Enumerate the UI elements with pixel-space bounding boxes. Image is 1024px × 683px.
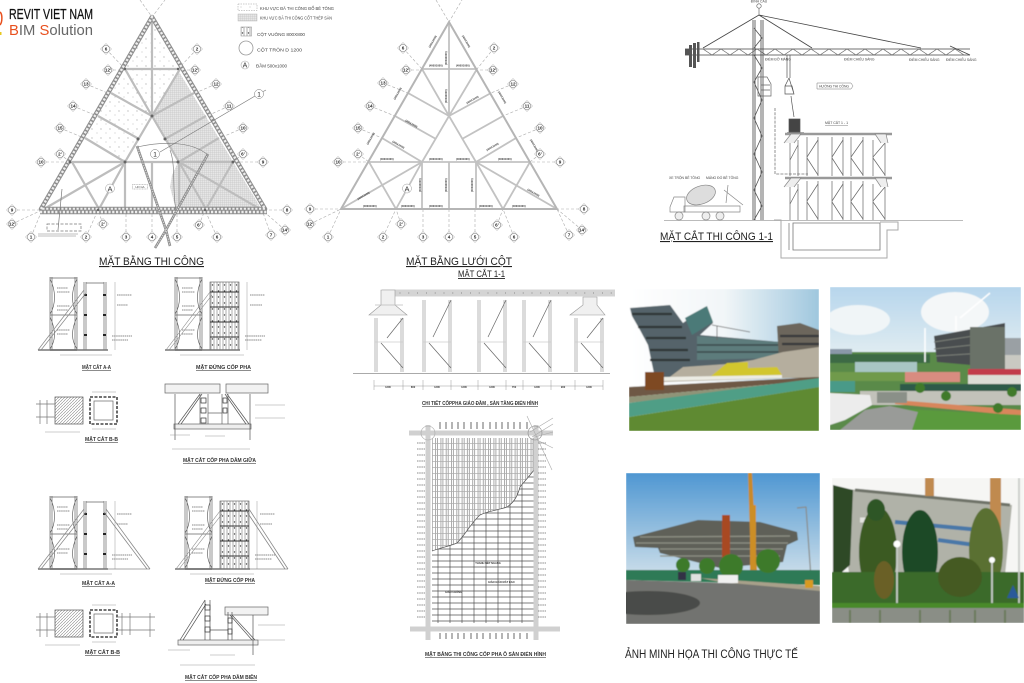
dimension line and labels: 1200 xyxy=(534,385,540,389)
axis tags: 10 xyxy=(240,126,246,131)
crane small labels: ĐIỂM CHIẾU SÁNG xyxy=(946,57,977,62)
heading: construction plan: MẶT BẰNG THI CÔNG xyxy=(99,255,204,268)
callout 1 right xyxy=(254,90,264,98)
beam size labels: (400X1000) xyxy=(392,87,403,100)
axis tags: 4 xyxy=(448,235,451,240)
perimeter band xyxy=(40,17,267,212)
ground line xyxy=(353,372,610,374)
beam size labels: (400X1000) xyxy=(529,138,539,152)
direction label xyxy=(817,83,853,89)
label elevation: MẶT ĐỨNG CỐP PHA xyxy=(196,364,251,371)
beam tag A: A xyxy=(107,184,113,194)
crane small labels: ĐIỂM CHIẾU SÁNG xyxy=(844,56,875,62)
beam size labels: (400X1000) xyxy=(392,139,405,150)
axis tags: 2 xyxy=(85,235,88,240)
axis tags: 10 xyxy=(335,160,341,165)
heading: construction section 1-1: MẶT CẮT THI CÔNG 1-1 xyxy=(660,230,773,243)
beam size labels: (400X1000) xyxy=(486,142,499,152)
label A-A: MẶT CẮT A-A xyxy=(82,363,111,371)
photo 1: curved building with green fence xyxy=(629,289,819,431)
slab speckle xyxy=(382,292,615,294)
column formwork details lower xyxy=(36,496,288,681)
axis tags: 5 xyxy=(474,235,477,240)
axis tags: 14' xyxy=(579,228,585,233)
axis tags: 2' xyxy=(58,152,62,157)
axis tags: 2 xyxy=(493,46,496,51)
callout 1 xyxy=(150,150,160,158)
axis tags: 15 xyxy=(57,126,63,131)
dimension line and labels: 1200 xyxy=(489,385,495,389)
axis tags: 12' xyxy=(192,68,198,73)
dimension line and labels xyxy=(374,380,603,390)
corner circles and fan xyxy=(421,416,553,470)
poured concrete area xyxy=(84,20,178,162)
callout 1 right: 1 xyxy=(257,92,261,98)
dimension line and labels: 750 xyxy=(512,385,517,389)
axis tags: 6' xyxy=(538,152,542,157)
beam size labels: (400X1000) xyxy=(461,34,471,48)
label edge beam: MẶT CẮT CỐP PHA DẦM BIÊN xyxy=(185,673,257,681)
counterweight xyxy=(685,42,700,68)
tower crane section xyxy=(664,0,977,258)
crane apex xyxy=(751,0,768,15)
axis tags: 6' xyxy=(495,223,499,228)
shoring frames xyxy=(375,300,603,372)
concrete pipe xyxy=(775,108,808,174)
legend texts: ĐẦM 500x1000 xyxy=(256,64,288,68)
axis tags: 4 xyxy=(151,235,154,240)
axis tags: 9 xyxy=(11,208,14,213)
beam size labels: (400X1000) xyxy=(444,178,448,192)
column formwork details upper xyxy=(36,277,285,464)
beam size labels: (400X1000) xyxy=(429,204,443,208)
photo 3: building and road under blue sky xyxy=(626,473,820,624)
side ticks xyxy=(417,443,546,617)
beam size labels: (400X1000) xyxy=(380,157,394,161)
beams xyxy=(341,22,557,209)
axis tags: 6' xyxy=(241,152,245,157)
crane mast xyxy=(753,20,763,220)
legend symbol: beam A: A xyxy=(243,62,248,70)
axis tags: 12' xyxy=(403,68,409,73)
note box: HO GA xyxy=(135,185,145,189)
label A-A lower: MẶT CẮT A-A xyxy=(82,579,115,587)
beam size labels: (400X1000) xyxy=(526,187,540,198)
callout 1: 1 xyxy=(153,152,157,158)
beam size labels: (400X1000) xyxy=(363,204,377,208)
beam size labels: (400X1000) xyxy=(456,64,470,68)
beam size labels: (400X1000) xyxy=(356,191,370,201)
heading: section 1-1 mid: MẶT CẮT 1-1 xyxy=(458,269,505,279)
truck labels: XE TRỘN BÊ TÔNG xyxy=(669,175,701,180)
axis tags: 12' xyxy=(9,222,15,227)
upper dense grid pattern xyxy=(432,438,534,551)
dimension line and labels: 1200 xyxy=(434,385,440,389)
column nodes xyxy=(68,68,234,211)
axis tags: 14 xyxy=(70,104,76,109)
axis tags: 12 xyxy=(510,82,516,87)
beam size labels: (400X1000) xyxy=(479,204,493,208)
beam size labels: (400X1000) xyxy=(404,118,418,129)
middle beam section xyxy=(165,384,285,449)
axis tags: 8 xyxy=(286,208,289,213)
legend texts: KHU VỰC ĐÃ THI CÔNG CỐT THÉP SÀN xyxy=(260,16,332,20)
foundation pit xyxy=(774,220,898,258)
legend texts: KHU VỰC ĐÃ THI CÔNG ĐỔ BÊ TÔNG xyxy=(260,6,335,11)
section A-A xyxy=(38,277,132,355)
dimension line and labels: 1200 xyxy=(586,385,592,389)
direction label: HƯỚNG THI CÔNG xyxy=(819,84,849,88)
axis tags: 3 xyxy=(125,235,128,240)
logo: REVIT VIET NAM BIM Solution: BIM Solution xyxy=(9,22,93,39)
beam size labels: (400X1000) xyxy=(497,90,507,104)
axis tags: 9 xyxy=(559,160,562,165)
beam size labels: (400X1000) xyxy=(427,35,438,48)
legend texts xyxy=(256,6,335,68)
beam tag A: A xyxy=(404,184,410,194)
axis tags: 11 xyxy=(525,104,530,109)
plan notes: THANH NÉP NGANG xyxy=(475,560,501,565)
caption: formwork detail: CHI TIẾT CỐPPHA GIÁO ĐẦM , SÀN TẦNG ĐIỂN HÌNH xyxy=(422,399,538,407)
section 1-1 drawing xyxy=(353,290,615,390)
axis tags: 6 xyxy=(513,235,516,240)
crane small labels: ĐIỂM ĐỠ MÁNG xyxy=(765,56,791,62)
mobile crane jibs xyxy=(137,146,208,248)
axis tags: 2 xyxy=(382,235,385,240)
beam size labels: (400X1000) xyxy=(466,95,479,105)
plan notes xyxy=(445,560,515,594)
axis tags: 8 xyxy=(583,207,586,212)
axis tags: 11 xyxy=(227,104,232,109)
floors and shoring xyxy=(784,134,892,220)
hook and bucket xyxy=(785,55,804,133)
logo: REVIT VIET NAM BIM Solution xyxy=(0,6,93,39)
caption: typical floor plan: MẶT BẰNG THI CÔNG CỐP PHA Ô SÀN ĐIỂN HÌNH xyxy=(425,650,546,658)
beam tag A xyxy=(106,184,114,194)
rebar area xyxy=(152,70,262,210)
dimension line and labels: 1200 xyxy=(461,385,467,389)
lower grid xyxy=(432,438,535,623)
axis tags: 14' xyxy=(282,228,288,233)
axis tags: 9 xyxy=(262,160,265,165)
photo 4: building behind trees xyxy=(832,478,1024,623)
axis tags: 12' xyxy=(105,68,111,73)
axis tags: 13 xyxy=(83,82,89,87)
top and bottom arrows xyxy=(440,422,527,639)
axis tags: 12' xyxy=(307,222,313,227)
axis tags: 9 xyxy=(309,207,312,212)
beam size labels: (400X1000) xyxy=(498,157,512,161)
axis tags: 2' xyxy=(101,222,105,227)
axis tags xyxy=(304,42,590,242)
axis tags: 6 xyxy=(216,235,219,240)
axis tags: 14 xyxy=(367,104,373,109)
axis tags: 15 xyxy=(355,126,361,131)
section A-A lower xyxy=(38,496,150,574)
beam size labels: (400X1000) xyxy=(365,132,376,146)
sweep curve and leader xyxy=(137,90,266,210)
beam size labels: (400X1000) xyxy=(429,64,443,68)
legend texts: CỘT VUÔNG 800X800 xyxy=(257,32,306,37)
axis tags: 10 xyxy=(537,126,543,131)
beam size labels: (400X1000) xyxy=(444,89,448,103)
perimeter xyxy=(341,22,557,209)
label B-B: MẶT CẮT B-B xyxy=(85,435,118,443)
crane small labels: ĐIỂM CHIẾU SÁNG xyxy=(909,57,940,62)
axis tags: 12' xyxy=(490,68,496,73)
photo 2: high-rise under scaffolding with lake xyxy=(826,287,1021,430)
crane jib xyxy=(685,15,970,55)
legend symbol: round column xyxy=(239,41,253,55)
axis tags: 3 xyxy=(422,235,425,240)
typical floor formwork plan xyxy=(409,416,560,640)
axis tags: 10 xyxy=(38,160,44,165)
axis tags: 6 xyxy=(402,46,405,51)
crane small labels xyxy=(765,56,977,62)
logo: REVIT VIET NAM BIM Solution: REVIT VIET NAM xyxy=(9,6,93,23)
axis tags xyxy=(6,44,292,242)
plan notes: GIÁO CHỐNG xyxy=(445,589,462,594)
dimension line and labels: 900 xyxy=(561,385,566,389)
column grid plan triangle xyxy=(304,0,590,242)
axis lines xyxy=(12,0,287,237)
label elevation lower: MẶT ĐỨNG CỐP PHA xyxy=(205,577,255,584)
beam size labels: (400X1000) xyxy=(456,157,470,161)
beam size labels xyxy=(356,34,540,208)
axis tags: 7 xyxy=(270,233,273,238)
label B-B lower: MẶT CẮT B-B xyxy=(85,648,120,656)
beam tag A xyxy=(402,184,412,194)
ground line xyxy=(664,220,963,222)
break curve xyxy=(432,470,534,551)
axis tags: 5 xyxy=(176,235,179,240)
axis tags: 1 xyxy=(327,235,330,240)
legend xyxy=(238,4,335,70)
beam size labels: (400X1000) xyxy=(401,204,415,208)
plan notes: GIÀN GIÁO MẮT BAO xyxy=(488,579,515,584)
tower crane mark xyxy=(38,189,81,236)
axis tags: 2 xyxy=(196,47,199,52)
construction plan triangle xyxy=(6,0,292,248)
drop beams xyxy=(369,290,605,315)
axis tags: 13 xyxy=(380,81,386,86)
legend swatch: rebar area xyxy=(238,14,257,21)
beam size labels: (400X1000) xyxy=(429,157,443,161)
heading: column grid plan: MẶT BẰNG LƯỚI CỘT xyxy=(406,255,512,268)
section label: MẶT CẮT 1 - 1 xyxy=(825,120,848,125)
concrete mixer truck xyxy=(670,181,743,220)
beam size labels: (400X1000) xyxy=(512,204,526,208)
axis tags: 6 xyxy=(105,47,108,52)
beam grid xyxy=(44,22,260,209)
dimension line and labels: 1200 xyxy=(385,385,391,389)
legend texts: CỘT TRÒN D 1200 xyxy=(257,48,303,52)
elevation formwork xyxy=(165,277,265,355)
axis lines xyxy=(310,0,584,237)
upper dense grid above curve xyxy=(432,438,534,551)
beam size labels: (400X1000) xyxy=(444,51,448,65)
axis tags: 2' xyxy=(356,152,360,157)
label middle beam: MẶT CẮT CỐP PHA DẦM GIỮA xyxy=(183,456,256,464)
axis tags: 6' xyxy=(197,223,201,228)
section B-B xyxy=(36,392,117,432)
axis tags: 7 xyxy=(568,233,571,238)
surrounding beams xyxy=(409,425,560,640)
elevation lower xyxy=(175,496,288,574)
section B-B lower xyxy=(36,605,155,645)
axis tags: 1 xyxy=(30,235,33,240)
crane cabin xyxy=(758,77,771,96)
legend swatch: concrete area xyxy=(238,4,257,10)
note box xyxy=(132,184,148,189)
truck labels: MÁNG ĐỔ BÊ TÔNG xyxy=(706,175,739,180)
caption: real construction photos: ẢNH MINH HỌA THI CÔNG THỰC TẾ xyxy=(625,648,798,661)
beam size labels: (400X1000) xyxy=(470,178,474,192)
beam size labels: (400X1000) xyxy=(418,178,422,192)
axis tags: 12 xyxy=(213,82,219,87)
legend symbol: square column xyxy=(241,27,252,36)
axis tags: 2' xyxy=(399,222,403,227)
edge beam section xyxy=(168,600,285,665)
slab xyxy=(382,290,615,296)
truck labels xyxy=(669,175,739,180)
dimension line and labels: 800 xyxy=(411,385,416,389)
